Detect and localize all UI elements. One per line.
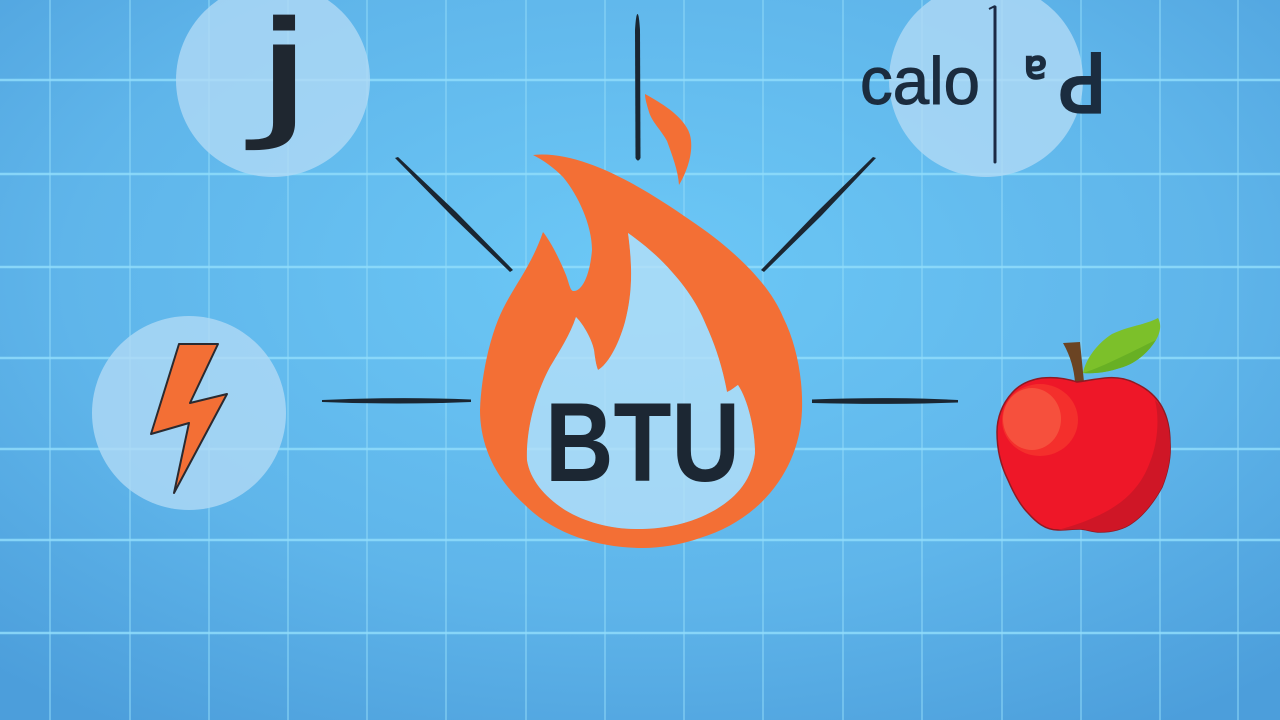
- connector lines: [322, 14, 958, 404]
- icon: apple: [997, 318, 1170, 532]
- icon: lightning circle: [92, 316, 286, 510]
- icon: calorie circle: a: [1024, 48, 1047, 92]
- flame tip: [645, 94, 691, 185]
- icon: joule circle: [176, 0, 370, 177]
- icon: calorie circle: [860, 0, 1108, 177]
- apple shadow: [1058, 400, 1170, 532]
- icon: BTU flame: [480, 94, 802, 548]
- text: BTU: BTU: [545, 380, 740, 505]
- stem: [1063, 342, 1084, 382]
- flame body: [480, 155, 802, 548]
- flame inner: [527, 233, 755, 529]
- apple body: [997, 378, 1170, 532]
- icon: calorie circle: P: [1059, 33, 1108, 128]
- icon: calorie circle: calo: [860, 44, 980, 119]
- leaf: [1083, 318, 1160, 373]
- apple highlight: [1002, 384, 1078, 456]
